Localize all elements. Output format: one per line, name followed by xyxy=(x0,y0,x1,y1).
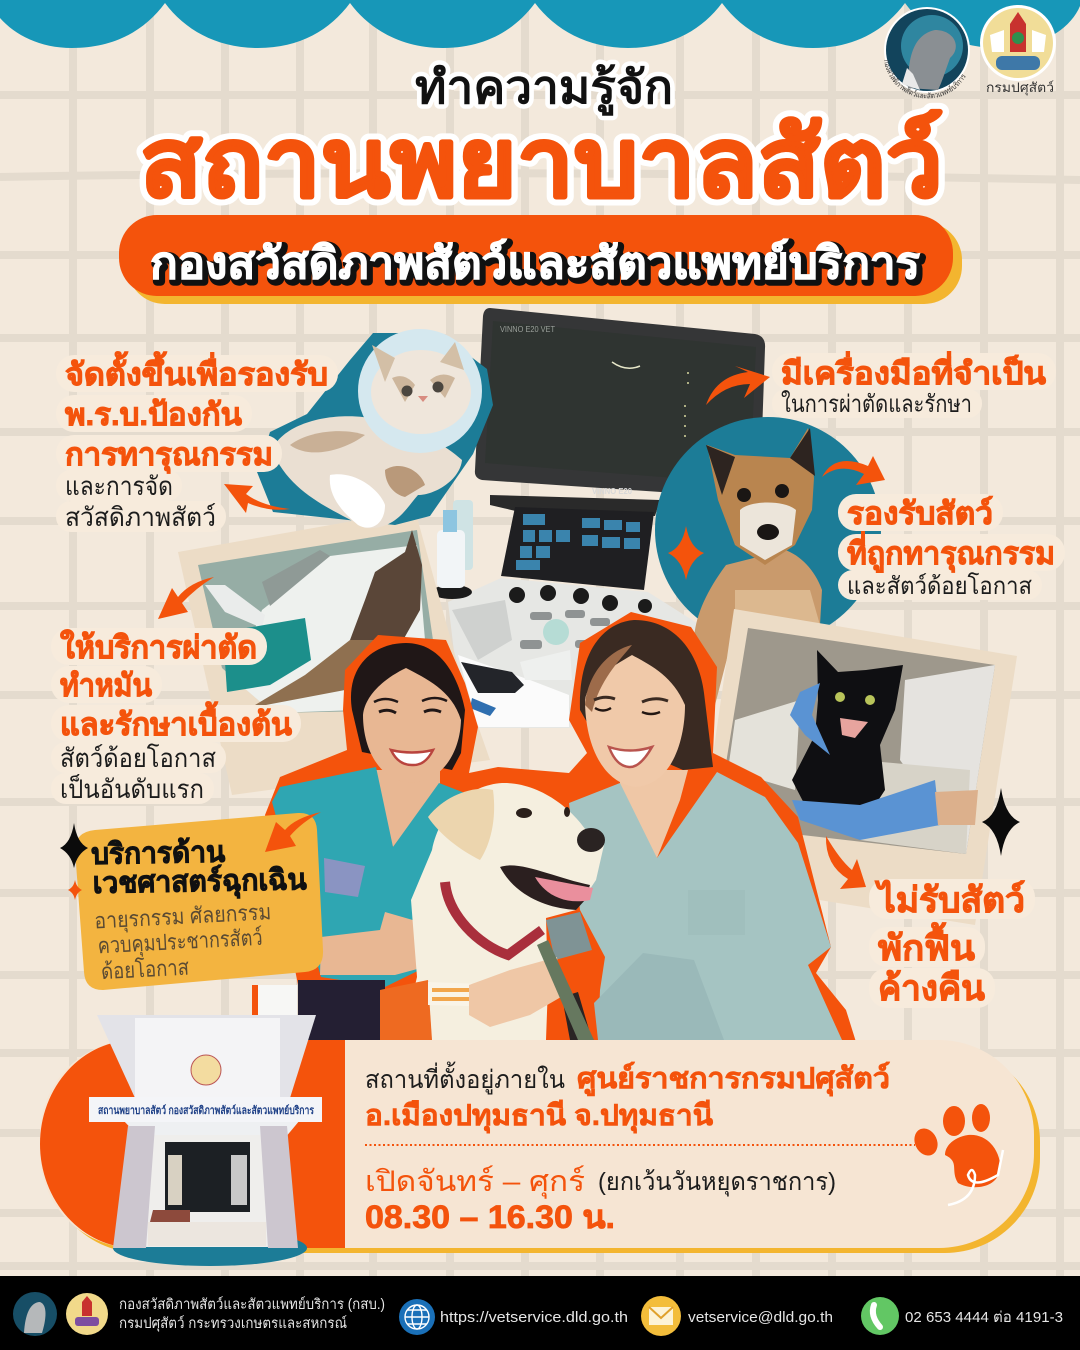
bottles xyxy=(453,500,473,570)
logo: animal welfare division: กองสวัสดิภาพสัตว์และสัตวแพทย์บริการ xyxy=(884,60,966,98)
left vet scrubs xyxy=(272,767,475,987)
email: vetservice@dld.go.th xyxy=(688,1309,833,1326)
text block: no overnight recovery xyxy=(869,879,1035,1008)
text block: no overnight recovery: ไม่รับสัตว์ xyxy=(874,879,1025,920)
cat head xyxy=(371,350,471,434)
building photo xyxy=(89,1015,322,1266)
right vet xyxy=(546,620,842,1040)
text block: equipment: ในการผ่าตัดและรักษา xyxy=(781,390,972,418)
glove xyxy=(205,585,265,628)
black cat xyxy=(792,650,903,828)
dog body xyxy=(694,550,822,705)
teal circle xyxy=(655,417,881,643)
location and hours panel: เปิดจันทร์ – ศุกร์ xyxy=(365,1165,585,1199)
harness xyxy=(380,980,432,1040)
sparkles xyxy=(60,823,88,868)
icon: phone xyxy=(861,1297,899,1335)
arrow: dog to text xyxy=(822,456,885,485)
right vet scrubs xyxy=(569,772,842,1040)
phone number: 02 653 4444 ต่อ 4191-3 xyxy=(905,1309,1063,1326)
location and hours panel xyxy=(40,1015,1040,1266)
text block: purpose xyxy=(56,351,338,532)
text block: abused animals xyxy=(838,494,1065,600)
dog in teal circle xyxy=(655,417,881,705)
text block: purpose: สวัสดิภาพสัตว์ xyxy=(65,502,216,532)
icon: paw xyxy=(910,1104,1003,1205)
yellow card: emergency medicine: บริการด้าน xyxy=(91,837,226,871)
text block: purpose: จัดตั้งขึ้นเพื่อรองรับ xyxy=(65,351,328,392)
dog head xyxy=(707,428,814,565)
stand xyxy=(490,495,660,516)
footer bar xyxy=(0,1276,1080,1350)
photo: black cat xyxy=(695,609,1017,925)
yellow card: emergency medicine xyxy=(60,813,323,990)
text block: surgery services: และรักษาเบื้องต้น xyxy=(60,701,292,742)
arrow: surgery photo to text xyxy=(158,577,214,619)
arrow: to yellow card xyxy=(265,812,321,852)
ultrasound machine: VINNO E20 xyxy=(592,487,633,496)
right vet hand xyxy=(469,957,561,1027)
dog ear xyxy=(428,789,494,860)
yellow card: emergency medicine: เวชศาสตร์ฉุกเฉิน xyxy=(92,862,307,901)
white post fragment xyxy=(252,985,297,1020)
subtitle pill xyxy=(119,215,962,304)
text block: surgery services: ให้บริการผ่าตัด xyxy=(60,629,257,665)
text block: no overnight recovery: ค้างคืน xyxy=(878,969,985,1008)
photo frame xyxy=(695,609,1017,925)
organization text: กรมปศุสัตว์ กระทรวงเกษตรและสหกรณ์ xyxy=(119,1315,347,1332)
text block: equipment: มีเครื่องมือที่จำเป็น xyxy=(781,351,1046,391)
cat body xyxy=(272,416,462,528)
location and hours panel: ศูนย์ราชการกรมปศุสัตว์ xyxy=(577,1061,890,1096)
touch panel xyxy=(501,507,654,590)
text block: abused animals: และสัตว์ด้อยโอกาส xyxy=(847,572,1032,600)
logo: department of livestock: กรมปศุสัตว์ xyxy=(986,80,1054,96)
top scalloped awning xyxy=(0,0,1080,48)
subtitle pill: กองสวัสดิภาพสัตว์และสัตวแพทย์บริการ xyxy=(150,238,920,288)
arrows xyxy=(158,366,885,889)
text block: purpose: การทารุณกรรม xyxy=(65,437,273,474)
text block: surgery services: เป็นอันดับแรก xyxy=(60,773,204,804)
text block: abused animals: รองรับสัตว์ xyxy=(847,496,993,531)
cat with cone xyxy=(257,329,493,528)
control knobs xyxy=(509,585,652,613)
logo: department of livestock xyxy=(980,5,1056,96)
location and hours panel: อ.เมืองปทุมธานี จ.ปทุมธานี xyxy=(365,1100,713,1133)
text block: purpose: และการจัด xyxy=(65,471,173,501)
plastic cone xyxy=(358,329,482,453)
dog mouth xyxy=(500,865,590,910)
vets and dog group xyxy=(252,612,856,1042)
footer logos xyxy=(13,1292,108,1336)
website: https://vetservice.dld.go.th xyxy=(440,1309,628,1326)
left vet xyxy=(272,643,475,1040)
machine base xyxy=(448,578,700,728)
orange outline xyxy=(265,612,856,1042)
location and hours panel: สถานที่ตั้งอยู่ภายใน xyxy=(365,1061,565,1095)
organization text: กองสวัสดิภาพสัตว์และสัตวแพทย์บริการ (กสบ.) xyxy=(119,1296,385,1313)
photo: surgery xyxy=(178,510,490,795)
orange left block xyxy=(40,1040,345,1248)
text block: surgery services: ทำหมัน xyxy=(60,668,152,703)
text block: abused animals: ที่ถูกทารุณกรรม xyxy=(847,531,1055,573)
yellow card: emergency medicine: ควบคุมประชากรสัตว์ xyxy=(97,925,263,959)
building photo: สถานพยาบาลสัตว์ กองสวัสดิภาพสัตว์และสัตวแพทย์บริการ xyxy=(98,1104,314,1117)
arrow: cat to purpose xyxy=(224,484,290,513)
white dog xyxy=(380,783,605,1040)
location and hours panel: 08.30 – 16.30 น. xyxy=(365,1199,615,1235)
ultrasound machine xyxy=(432,308,765,728)
subtitle pill: กองสวัสดิภาพสัตว์และสัตวแพทย์บริการ xyxy=(153,241,923,291)
organization text xyxy=(119,1296,385,1332)
black sparkle xyxy=(982,788,1020,856)
icon: mail xyxy=(641,1296,681,1336)
title: intro line: ทำความรู้จัก xyxy=(415,61,673,116)
monitor xyxy=(475,308,765,498)
blue gloves xyxy=(790,683,830,755)
photo frame xyxy=(178,510,490,795)
tabby cat xyxy=(350,530,422,650)
image xyxy=(716,628,995,854)
title: animal hospital: สถานพยาบาลสัตว์ xyxy=(140,110,943,217)
leash xyxy=(537,940,594,1040)
location and hours panel: (ยกเว้นวันหยุดราชการ) xyxy=(598,1168,836,1197)
text block: surgery services: สัตว์ด้อยโอกาส xyxy=(60,743,216,773)
yellow card: emergency medicine: อายุรกรรม ศัลยกรรม xyxy=(94,899,272,934)
arrow: equipment xyxy=(706,366,770,405)
collar xyxy=(445,882,542,955)
star xyxy=(668,526,704,580)
text block: equipment xyxy=(772,351,1056,418)
shadow behind leash xyxy=(562,992,592,1040)
teal backdrop xyxy=(257,333,493,525)
logo: animal welfare division xyxy=(884,7,970,98)
arrow: black cat to text xyxy=(826,836,866,889)
ultrasound machine: VINNO E20 VET xyxy=(500,325,555,334)
yellow card: emergency medicine: ด้อยโอกาส xyxy=(100,955,190,984)
text block: surgery services xyxy=(51,628,301,804)
teal drape xyxy=(223,618,311,692)
monitor screen xyxy=(485,321,756,484)
icon: globe xyxy=(399,1299,435,1335)
text block: no overnight recovery: พักฟื้น xyxy=(878,922,975,968)
surgery image xyxy=(198,530,433,713)
title: animal hospital: สถานพยาบาลสัตว์ xyxy=(140,110,943,217)
text block: purpose: พ.ร.บ.ป้องกัน xyxy=(65,397,242,432)
